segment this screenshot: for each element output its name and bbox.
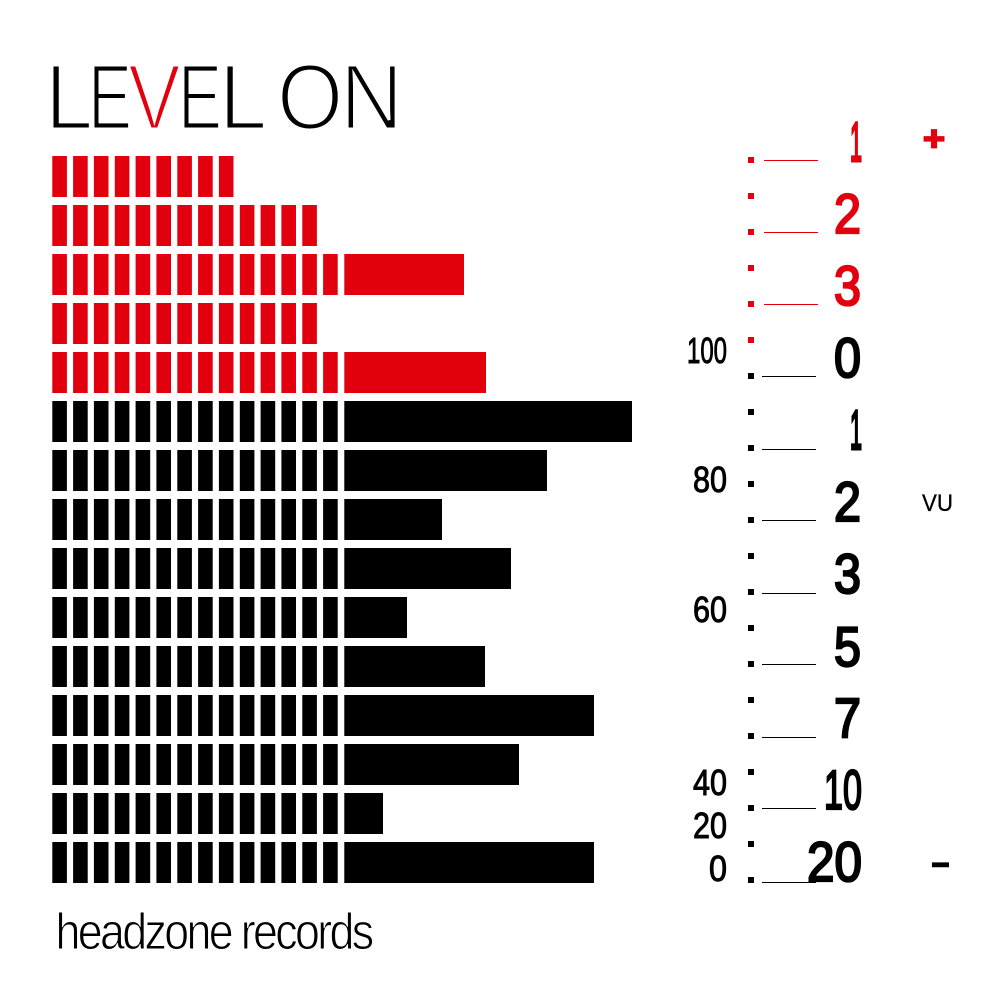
title: N — [340, 45, 403, 149]
bar row 8 black — [52, 499, 442, 540]
bar row 11 black — [52, 646, 485, 687]
title: E — [178, 45, 222, 149]
percent scale numbers left: 100 — [687, 330, 727, 371]
scale lines — [762, 160, 818, 883]
text: 1 — [850, 398, 862, 461]
bar row 3 red — [52, 254, 464, 295]
title: O — [277, 45, 343, 149]
title: L — [219, 45, 267, 149]
VU scale numbers right: 20 — [807, 830, 862, 893]
bar row 5 red — [52, 352, 486, 393]
VU scale numbers right: 5 — [834, 615, 861, 678]
bar row 1 red — [52, 156, 233, 197]
percent scale numbers left: 60 — [693, 589, 727, 630]
bar row 6 black — [52, 401, 632, 442]
VU scale numbers right: 3 — [834, 542, 861, 605]
VU scale numbers right: 7 — [834, 686, 861, 749]
percent scale numbers left — [687, 330, 727, 889]
minus sign: - — [930, 841, 951, 882]
title: E — [88, 45, 132, 149]
bar row 2 red — [52, 205, 317, 246]
plus sign: + — [923, 120, 945, 158]
bar row 13 black — [52, 744, 519, 785]
VU scale numbers right: 2 — [834, 470, 861, 533]
scale tick dots — [748, 157, 754, 883]
title: L — [45, 45, 93, 149]
bar row 12 black — [52, 695, 594, 736]
percent scale numbers left: 80 — [693, 459, 727, 500]
VU scale numbers right: 3 — [834, 254, 861, 317]
VU label: VU — [922, 490, 953, 517]
title: V — [128, 45, 181, 149]
VU scale numbers right: 10 — [824, 758, 862, 821]
bar row 15 black — [52, 842, 594, 883]
bar row 10 black — [52, 597, 407, 638]
title — [45, 45, 403, 149]
percent scale numbers left: 40 — [693, 762, 727, 803]
VU scale numbers right: 2 — [834, 182, 861, 245]
text: 1 — [850, 110, 862, 173]
bar row 4 red — [52, 303, 317, 344]
percent scale numbers left: 0 — [709, 848, 727, 889]
VU scale numbers right: 0 — [834, 326, 861, 389]
bar row 9 black — [52, 548, 511, 589]
footer label: headzone records — [56, 903, 373, 960]
bar row 14 black — [52, 793, 383, 834]
bar row 7 black — [52, 450, 547, 491]
VU scale numbers right — [807, 110, 862, 893]
percent scale numbers left: 20 — [693, 805, 727, 846]
bar chart — [52, 156, 632, 883]
